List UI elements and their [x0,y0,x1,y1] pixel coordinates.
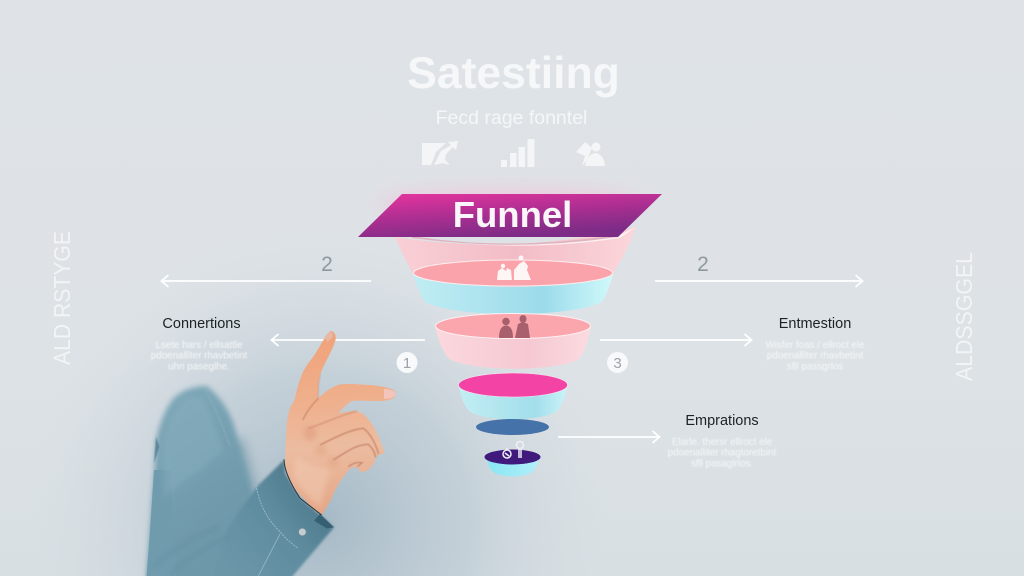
title: Satestiing [407,49,620,98]
callout: Entmestion [765,316,865,372]
funnel tier 1: pink ellipse [414,260,612,286]
funnel tier 4: blue disc [476,419,549,435]
callout body text: pdoenalliter rhavbetint [767,350,863,362]
hand [285,331,396,515]
funnel tier 3: magenta bowl [458,373,568,419]
funnel tier 1: top pink bowl [395,227,636,287]
arrow: middle right [600,339,751,341]
step badge 3 [607,352,628,373]
step number 2 left: 2 [321,253,333,276]
callout body text: pdoenalliter rhavbetint [151,350,247,362]
icon: two people on tier 2 [499,315,530,338]
callout body text: sfll pasaglrlos. [691,458,753,470]
icon row [422,139,605,167]
arrow: middle left [272,339,425,341]
callout body text: Wisfer foas / ellroct ele [765,340,865,351]
forearm and cuff [153,460,334,576]
arm and hand illustration [146,331,396,576]
band label: Funnel [453,194,572,235]
callout body text: sfll passgrlos [787,362,843,372]
funnel [358,187,662,476]
callout: Connertions: Connertions [162,316,241,332]
icon: bar chart [501,139,534,167]
step number 2 right: 2 [697,253,709,276]
cuff edge [284,459,322,515]
funnel label band [358,194,662,237]
callout body text: Elarle. thersr ellroct ele [672,437,773,448]
left vertical label: ALD RSTYGE [49,231,75,365]
funnel tier 5: small purple bowl [484,450,540,476]
callout body text: uhn paseglhe. [168,362,230,372]
icon: envelope with arrow [422,141,458,165]
callout: Connertions [151,316,247,372]
callout body text [765,340,865,372]
callout body text [668,437,776,470]
callout: Emprations [668,413,776,470]
arrow: lower right [558,436,659,438]
icon: people group on tier 1 [497,256,531,280]
step badge 1: 1 [403,355,411,372]
subtitle: Fecd rage fonntel [436,107,587,129]
funnel tier 1: blue band [413,274,613,314]
step badge 1 [396,352,418,373]
callout: Emprations: Emprations [685,413,759,429]
arrow: upper right [655,280,862,282]
funnel tier 2: pink bowl [435,314,591,369]
icon: people [576,142,605,166]
callout body text [151,340,247,372]
arrow: upper left [162,280,371,282]
shirt sleeve [146,386,260,576]
callout body text: Lsete hars / ellsattle [155,340,243,351]
step badge 3: 3 [613,355,622,372]
callout: Entmestion: Entmestion [779,316,851,332]
right vertical label: ALDSSGGEL [951,252,977,381]
funnel glow [375,187,645,219]
callout body text: pdoenalliter rhagtoretbint [668,448,776,458]
icon: tools on tier 5 [503,442,524,458]
